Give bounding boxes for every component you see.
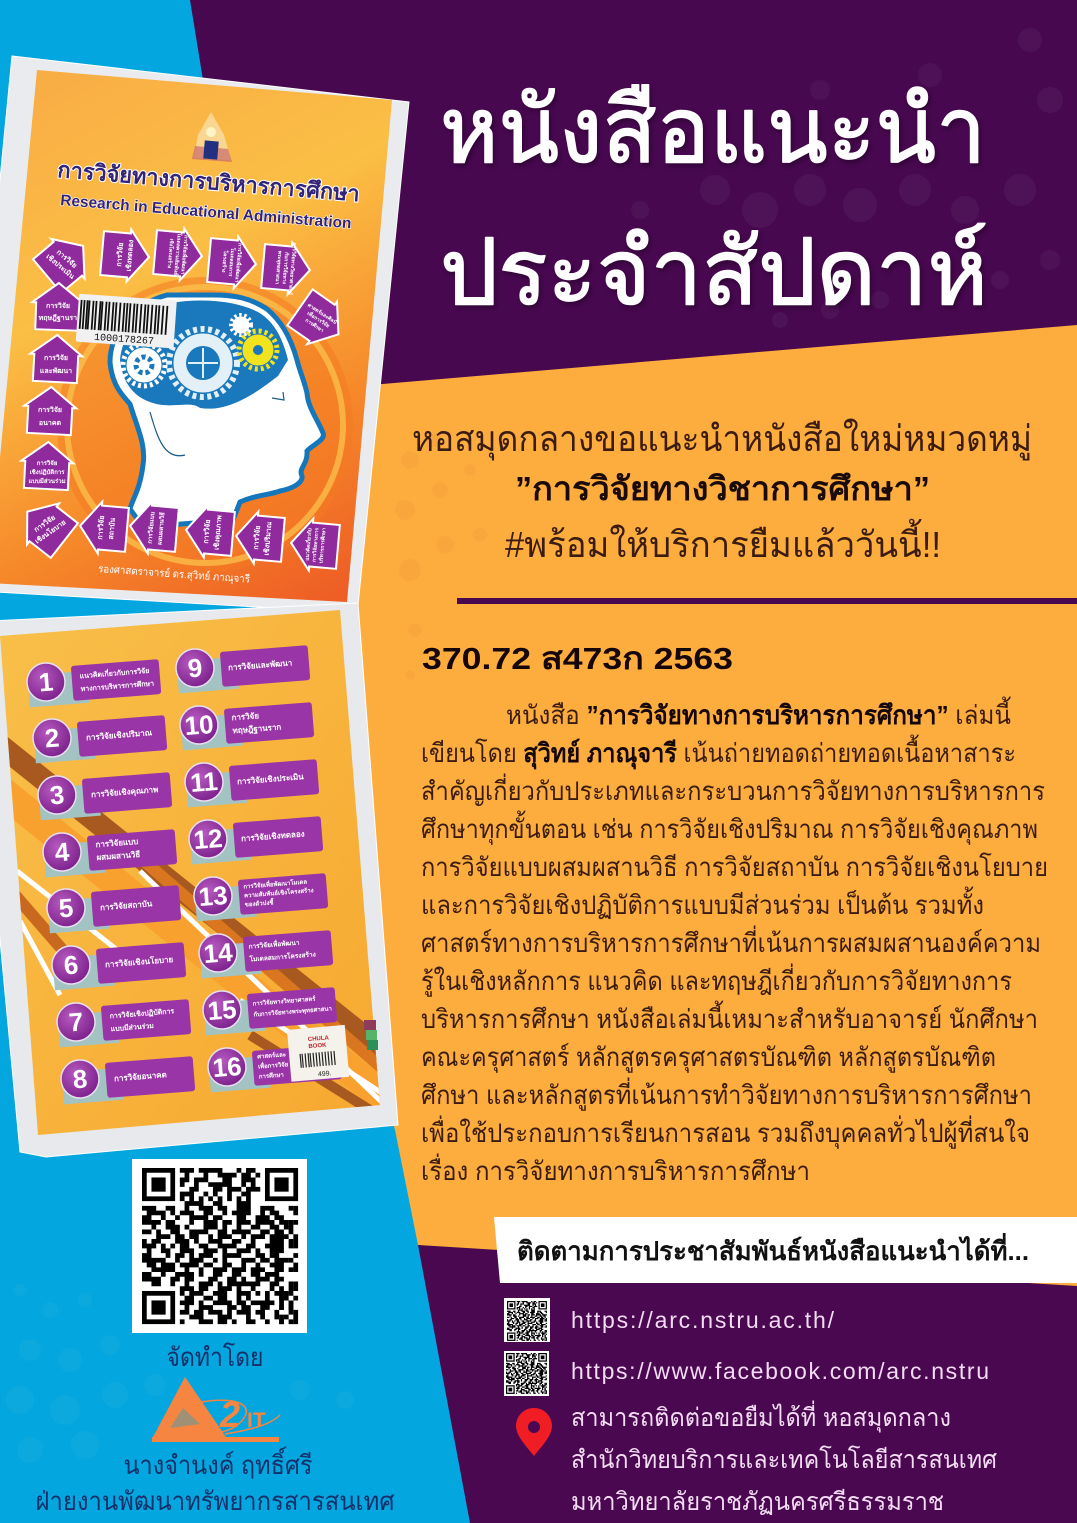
topic arrows: สถาบัน [107,517,117,540]
logo: A2IT [152,1377,280,1442]
numbered list: ศาสตร์และ [257,1050,286,1061]
numbered list: 9 [187,652,203,684]
description paragraph: เรื่อง การวิจัยทางการบริหารการศึกษา [421,1153,810,1186]
numbered list: 13 [197,880,229,912]
topic arrows: เชิงทดลอง [125,239,135,272]
topic arrows: การวิจัยเพื่อพัฒนา [233,243,245,283]
numbered list: 6 [63,949,79,981]
topic arrows: โมเดลความสัมพันธ์ [172,232,183,275]
description paragraph: เขียนโดย สุวิทย์ ภาณุจารี เน้นถ่ายทอดถ่ายทอดเนื้อหาสาระ [421,734,1016,770]
topic arrows: เชิงคุณภาพ [212,514,224,550]
topic arrows: อนาคต [39,420,62,427]
topic arrows: การวิจัย [37,459,58,467]
numbered list: การวิจัยเชิงทดลอง [241,829,305,843]
price sticker: CHULA [308,1035,330,1043]
numbered list: 7 [68,1006,84,1038]
topic arrows: เชิงปริมาณ [263,521,273,556]
author name: รองศาสตราจารย์ ดร.สุวิทย์ ภาณุจารี [98,562,251,586]
numbered list: 12 [192,823,224,855]
icon: location pin [516,1408,552,1456]
organiser name: นางจำนงค์ ฤทธิ์ศรี [124,1446,313,1480]
borrowing address: สำนักวิทยบริการและเทคโนโลยีสารสนเทศ [571,1445,997,1474]
orange dot pattern [395,433,487,680]
head silhouette [110,295,323,527]
numbered list: การวิจัยเชิงนโยบาย [105,954,174,969]
numbered list: 11 [189,766,219,798]
book page edges [0,603,398,1157]
numbered list: 3 [49,779,65,811]
numbered list: ของตัวบ่งชี้ [244,896,275,909]
spine colour tabs [364,1020,378,1050]
facebook url: https://www.facebook.com/arc.nstru [571,1358,989,1384]
numbered list: การวิจัยอนาคต [114,1070,167,1083]
numbered list: 1 [38,666,54,698]
description paragraph: รู้ในเชิงหลักการ แนวคิด และทฤษฎีเกี่ยวกับการวิจัยทางการ [421,963,1012,997]
qr code: facebook [504,1351,549,1396]
topic arrows: การวิจัยเพื่อพัฒนา [179,235,191,275]
numbered list: แนวคิดเกี่ยวกับการวิจัย [79,665,150,680]
description paragraph: เพื่อใช้ประกอบการเรียนการสอน รวมถึงบุคคลทั่วไปผู้ที่สนใจ [421,1115,1030,1149]
website url: https://arc.nstru.ac.th/ [571,1307,835,1333]
numbered list: ทางการบริหารการศึกษา [80,679,154,693]
topic arrows: เชิงนโยบาย [33,518,67,545]
description paragraph: คณะครุศาสตร์ หลักสูตรครุศาสตรบัณฑิต หลักสูตรบัณฑิต [421,1042,996,1073]
description paragraph [421,696,1048,1186]
numbered list: 14 [202,937,234,969]
intro line 2: ”การวิจัยทางวิชาการศึกษา” [515,470,930,507]
numbered list: การวิจัยเชิงประเมิน [237,772,304,786]
description paragraph: ศึกษา และหลักสูตรที่เน้นการทำวิจัยทางการบริหารการศึกษา [421,1077,1032,1111]
topic arrows: ทฤษฎีฐานราก [39,314,81,323]
topic arrows: การวิจัย [55,248,78,270]
numbered list: เพื่อการวิจัย [258,1059,289,1071]
borrowing address [571,1400,997,1516]
numbered list: การวิจัยสถาบัน [100,899,153,912]
organised by label: จัดทำโดย [166,1342,264,1372]
divider [457,598,1077,604]
follow banner: ติดตามการประชาสัมพันธ์หนังสือแนะนำได้ที่... [517,1232,1029,1266]
numbered list: ผสมผสานวิธี [96,849,141,862]
purple top panel [190,0,1077,400]
numbered list: กับการวิจัยทางพระพุทธศาสนา [253,1004,332,1019]
book page edges [0,56,409,612]
numbered list: 10 [183,709,215,741]
numbered list: การวิจัยเพื่อพัฒนา [248,937,300,951]
barcode sticker [76,294,177,349]
gears [123,315,277,397]
back book cover [0,600,400,1157]
numbered list: การวิจัยทางวิทยาศาสตร์ [252,995,317,1008]
title [440,80,988,324]
numbered list: 8 [72,1063,88,1095]
orange ring behind head [57,277,353,573]
front book cover [0,56,410,620]
borrowing address: สามารถติดต่อขอยืมได้ที่ หอสมุดกลาง [571,1400,951,1433]
topic arrows: โมเดลสมการ [227,246,236,277]
back cover artwork [0,600,400,1150]
purple bottom panel [418,1245,1077,1523]
numbered list: 5 [58,892,74,924]
numbered list: 16 [211,1051,243,1083]
purple dot pattern [631,28,1063,328]
intro line 3: #พร้อมให้บริการยืมแล้ววันนี้!! [505,518,941,565]
borrowing address: มหาวิทยาลัยราชภัฏนครศรีธรรมราช [571,1488,944,1516]
numbered list: การวิจัยเพื่อพัฒนาโมเดล [243,877,308,891]
topic arrows: บริหารการศึกษา [317,527,328,564]
topic arrows: การวิจัย [202,519,212,544]
numbered list: โมเดลสมการโครงสร้าง [248,949,316,964]
topic arrows: กับการวิจัยทาง [281,252,290,285]
numbered list: การศึกษา [259,1071,284,1081]
topic arrows: เพื่อการวิจัย [306,309,331,329]
topic arrows: การวิจัย [38,406,62,414]
topic arrows: การวิจัย [96,515,106,540]
topic arrows: และพัฒนา [40,367,72,375]
price sticker: 499. [318,1070,332,1078]
topic arrows: แบบมีส่วนร่วม [28,477,66,485]
numbered list: การวิจัยแบบ [95,837,139,849]
qr code: website [504,1298,550,1342]
cover subtitle: Research in Educational Administration [60,192,352,232]
numbered list: การวิจัยเชิงปริมาณ [86,728,153,742]
topic arrows: การวิจัยทางการ [311,527,321,562]
topic arrows: การวิจัยแบบ [146,511,156,544]
main qr code [132,1159,307,1333]
numbered list [26,640,343,1104]
orange panel [300,325,1077,1300]
topic arrows: การวิจัย [33,514,57,534]
topic arrows: การวิจัยทางวิทยาศาสตร์ [287,242,298,295]
organiser department: ฝ่ายงานพัฒนาทรัพยากรสารสนเทศ [36,1486,395,1516]
barcode sticker: 1000178267 [94,333,154,348]
description paragraph: และการวิจัยเชิงปฏิบัติการแบบมีส่วนร่วม เป็นต้น รวมทั้ง [421,886,984,920]
diagonal stripes [0,745,400,1110]
title line 1: หนังสือแนะนำ [440,80,986,182]
numbered list: แบบมีส่วนร่วม [110,1022,155,1033]
topic arrows: ผสมผสานวิธี [156,511,166,545]
numbered list: ความสัมพันธ์เชิงโครงสร้าง [244,886,314,900]
topic arrows: เชิงโครงสร้าง [166,238,175,269]
call number: 370.72 ส473ก 2563 [422,641,733,676]
numbered list: การวิจัยเชิงคุณภาพ [91,785,159,800]
numbered list: การวิจัยเชิงปฏิบัติการ [109,1007,175,1020]
follow banner [494,1217,1077,1283]
cover title: การวิจัยทางการบริหารการศึกษา [57,157,361,206]
topic arrows: ศาสตร์และศิลป์ [306,302,338,326]
topic arrows: การวิจัย [252,525,262,550]
eye and ear lines [150,392,284,456]
logo: A2IT: 2 [219,1394,240,1435]
price sticker [287,1025,349,1082]
title line 2: ประจำสัปดาห์ [440,222,988,324]
topic arrows: การวิจัย [44,354,68,362]
topic arrows: แนวคิดเกี่ยวกับ [303,528,313,561]
topic arrows: โครงสร้าง [220,249,229,273]
blue dot pattern [6,1284,354,1463]
topic arrows: เชิงประเมิน [44,252,76,281]
description paragraph: บริหารการศึกษา หนังสือเล่มนี้เหมาะสำหรับอาจารย์ นักศึกษา [421,1000,1038,1034]
topic arrows: พระพุทธศาสนา [274,250,282,285]
intro text [412,418,1032,565]
intro line 1: หอสมุดกลางขอแนะนำหนังสือใหม่หมวดหมู่ [412,418,1032,461]
numbered list: 4 [54,836,71,868]
numbered list: การวิจัย [231,711,260,722]
topic arrows: เชิงปฏิบัติการ [30,468,65,476]
numbered list: 15 [206,994,238,1026]
topic arrows: การศึกษา [304,317,325,334]
cover artwork [0,60,410,620]
price sticker: BOOK [308,1043,327,1050]
numbered list: การวิจัยและพัฒนา [228,658,293,672]
topic arrows: การวิจัย [46,302,70,310]
topic arrows: การวิจัย [115,242,125,267]
numbered list: 2 [44,722,60,754]
description paragraph: หนังสือ ”การวิจัยทางการบริหารการศึกษา” เล่มนี้ [506,696,1011,730]
logo: A2IT: IT [247,1409,266,1432]
numbered list: ทฤษฎีฐานราก [232,722,282,736]
brain [120,300,288,409]
topic arrows [11,226,353,573]
university emblem [192,112,232,162]
